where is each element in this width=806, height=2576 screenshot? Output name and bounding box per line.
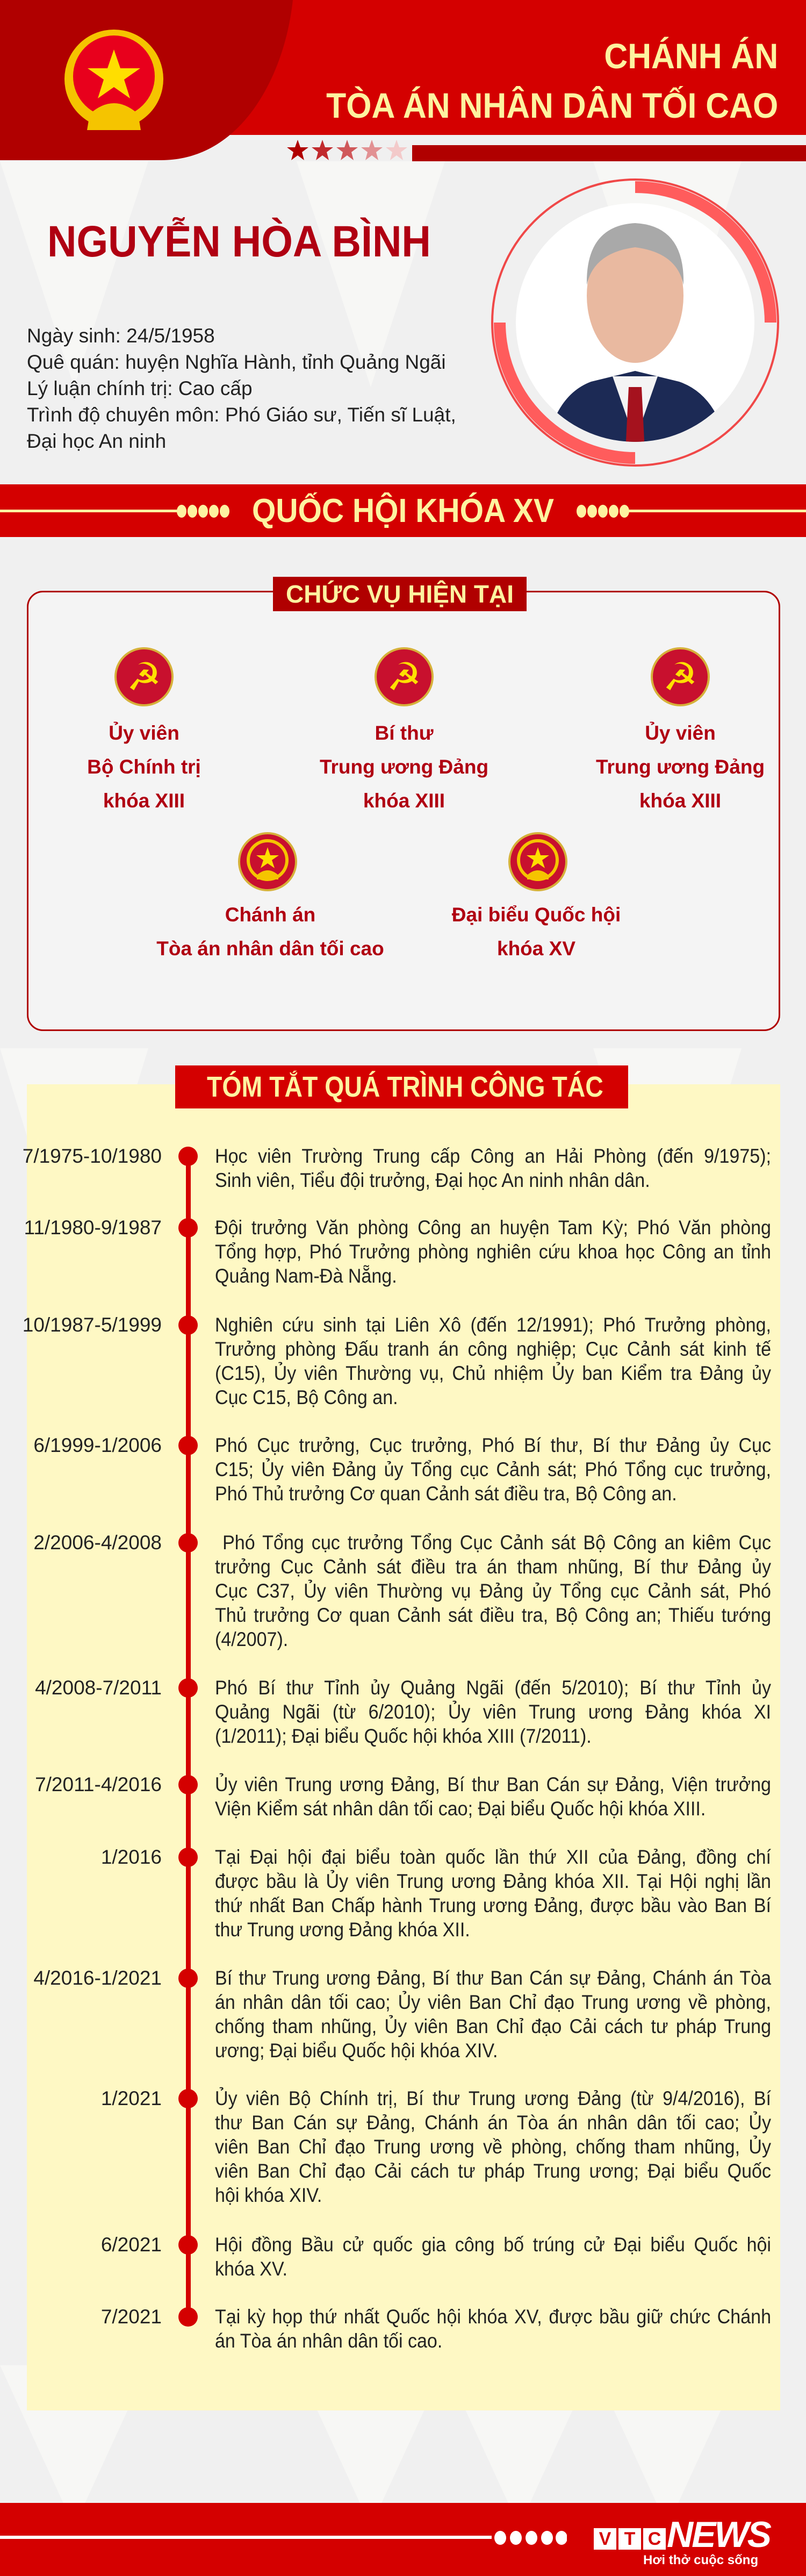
timeline item 9: án nhân dân tối cao; Ủy viên Ban Chỉ đạo Trung ương về phòng, [215, 1991, 771, 2013]
timeline item 5: 2/2006-4/2008 [33, 1532, 162, 1554]
info text block: Lý luận chính trị: Cao cấp [27, 377, 253, 399]
timeline item 7 [35, 1773, 771, 1820]
info text block: Đại học An ninh [27, 430, 166, 452]
text: position 3 [596, 721, 765, 812]
text: position 5 [451, 904, 621, 960]
timeline item 3: Trưởng phòng Đấu tranh án công nghiệp; Cục Cảnh sát kinh tế [215, 1338, 771, 1360]
text: position 1: khóa XIII [103, 790, 185, 812]
label: current positions: CHỨC VỤ HIỆN TẠI [286, 580, 514, 608]
text: position 4: Chánh án [225, 904, 315, 926]
text: position 2: Bí thư [375, 722, 433, 744]
timeline item 8: thứ nhất Ban Chấp hành Trung ương Đảng, được bầu vào Ban Bí [215, 1894, 771, 1916]
icon: party emblem 1 [114, 647, 174, 706]
text: position 3: khóa XIII [639, 790, 721, 812]
timeline item 2: 11/1980-9/1987 [24, 1217, 162, 1239]
timeline item 6: Quảng Ngãi (từ 6/2010); Ủy viên Trung ương Đảng khóa XI [215, 1701, 771, 1723]
timeline item 10: viên Ban Chỉ đạo Trung ương về phòng, chống tham nhũng, Ủy [215, 2136, 771, 2158]
stars rating [287, 140, 407, 160]
timeline item 5: (4/2007). [215, 1628, 288, 1650]
timeline item 2: Quảng Nam-Đà Nẵng. [215, 1265, 397, 1287]
timeline item 8: thư Trung ương Đảng khóa XII. [215, 1919, 470, 1941]
logo: VTC News: T [624, 2529, 635, 2549]
info text block: Trình độ chuyên môn: Phó Giáo sư, Tiến sĩ Luật, [27, 404, 456, 426]
icon: party emblem 3: ☭ [663, 654, 697, 699]
info text block: Ngày sinh: 24/5/1958 [27, 325, 215, 347]
timeline item 9 [33, 1967, 772, 2062]
label: career summary: TÓM TẮT QUÁ TRÌNH CÔNG TÁC [207, 1071, 603, 1103]
timeline item 6: 4/2008-7/2011 [35, 1677, 162, 1699]
timeline line [186, 1156, 191, 2317]
timeline item 10: thư Ban Cán sự Đảng, Chánh án Tòa án nhân dân tối cao; Ủy [215, 2112, 771, 2134]
timeline item 2: Tổng hợp, Phó Trưởng phòng nghiên cứu khoa học Công an tỉnh [215, 1241, 771, 1263]
timeline item 8 [101, 1846, 771, 1941]
title: CHÁNH ÁN [604, 36, 778, 76]
info text block: Quê quán: huyện Nghĩa Hành, tỉnh Quảng Ngãi [27, 351, 446, 373]
timeline item 4: 6/1999-1/2006 [33, 1434, 162, 1456]
name heading: NGUYỄN HÒA BÌNH [47, 217, 431, 266]
timeline item 10: viên Ban Chỉ đạo Cải cách tư pháp Trung ương; Đại biểu Quốc [215, 2160, 771, 2182]
text: position 3: Ủy viên [645, 722, 716, 744]
header banner [0, 0, 806, 135]
icon: party emblem 2 [375, 647, 434, 706]
timeline item 12: án Tòa án nhân dân tối cao. [215, 2330, 442, 2352]
title [326, 36, 778, 125]
icon: national emblem 2 [508, 832, 567, 891]
timeline item 8: 1/2016 [101, 1846, 162, 1868]
timeline item 4 [33, 1434, 771, 1505]
text: position 2 [320, 722, 488, 812]
timeline item 4: Phó Cục trưởng, Cục trưởng, Phó Bí thư, Bí thư Đảng ủy Cục [215, 1434, 771, 1456]
timeline item 5: Phó Tổng cục trưởng Tổng Cục Cảnh sát Bộ Công an kiêm Cục [222, 1532, 771, 1554]
timeline item 11: khóa XV. [215, 2258, 287, 2280]
timeline item 9: chống tham nhũng, Ủy viên Ban Chỉ đạo Cải cách tư pháp Trung [215, 2015, 771, 2037]
timeline item 10: 1/2021 [101, 2087, 162, 2109]
timeline item 6: (1/2011); Đại biểu Quốc hội khóa XIII (7/2011). [215, 1725, 592, 1747]
logo: VTC News: C [648, 2529, 661, 2549]
portrait [491, 178, 779, 467]
timeline item 11: 6/2021 [101, 2234, 162, 2256]
timeline item 5: Cục C37, Ủy viên Thường vụ Đảng ủy Tổng cục Cảnh sát, Phó [215, 1580, 771, 1602]
timeline item 5 [33, 1532, 771, 1650]
timeline item 8: Tại Đại hội đại biểu toàn quốc lần thứ XII của Đảng, đồng chí [215, 1846, 771, 1868]
logo: VTC News: NEWS [667, 2514, 770, 2555]
timeline item 3: 10/1987-5/1999 [23, 1314, 162, 1336]
timeline item 12: Tại kỳ họp thứ nhất Quốc hội khóa XV, được bầu giữ chức Chánh [215, 2306, 771, 2328]
timeline item 3: Nghiên cứu sinh tại Liên Xô (đến 12/1991); Phó Trưởng phòng, [215, 1314, 771, 1336]
timeline item 11: Hội đồng Bầu cử quốc gia công bố trúng cử Đại biểu Quốc hội [215, 2234, 771, 2256]
timeline item 5: trưởng Cục Cảnh sát điều tra án tham nhũng, Bí thư Đảng ủy [215, 1556, 771, 1578]
timeline item 3: (C15), Ủy viên Thường vụ, Chủ nhiệm Ủy ban Kiểm tra Đảng ủy [215, 1362, 771, 1384]
text: position 1: Ủy viên [109, 722, 179, 744]
text: position 5: khóa XV [497, 938, 575, 960]
timeline item 10 [101, 2087, 771, 2206]
icon: party emblem 2: ☭ [387, 654, 421, 699]
title: TÒA ÁN NHÂN DÂN TỐI CAO [326, 85, 778, 125]
timeline item 11 [101, 2234, 771, 2280]
text: position 2: khóa XIII [363, 790, 445, 812]
timeline item 7: Ủy viên Trung ương Đảng, Bí thư Ban Cán sự Đảng, Viện trưởng [215, 1773, 771, 1795]
banner: Quốc hội khóa XV: QUỐC HỘI KHÓA XV [252, 492, 554, 529]
timeline item 10: hội khóa XIV. [215, 2184, 322, 2206]
timeline item 5: Thủ trưởng Cơ quan Cảnh sát điều tra, Bộ Công an; Thiếu tướng [215, 1604, 771, 1626]
text: position 4: Tòa án nhân dân tối cao [156, 938, 384, 960]
timeline item 1: 7/1975-10/1980 [23, 1145, 162, 1167]
timeline item 9: 4/2016-1/2021 [33, 1967, 162, 1989]
timeline item 3 [23, 1314, 771, 1408]
text: position 2: Trung ương Đảng [320, 756, 488, 778]
timeline item 4: Phó Thủ trưởng Cơ quan Cảnh sát điều tra, Bộ Công an. [215, 1483, 677, 1505]
text: position 3: Trung ương Đảng [596, 756, 765, 778]
banner: Quốc hội khóa XV [0, 484, 806, 537]
text: position 5: Đại biểu Quốc hội [452, 904, 621, 926]
logo: VTC News: V [599, 2529, 611, 2549]
timeline item 1: Học viên Trường Trung cấp Công an Hải Phòng (đến 9/1975); [215, 1145, 771, 1167]
timeline item 3: Cục C15, Bộ Công an. [215, 1386, 398, 1408]
info text block [27, 325, 456, 452]
timeline item 4: C15; Ủy viên Đảng ủy Tổng cục Cảnh sát; Phó Tổng cục trưởng, [215, 1458, 771, 1480]
label: career summary [175, 1065, 628, 1108]
timeline item 12: 7/2021 [101, 2306, 162, 2328]
timeline item 9: Bí thư Trung ương Đảng, Bí thư Ban Cán sự Đảng, Chánh án Tòa [215, 1967, 771, 1989]
timeline item 2: Đội trưởng Văn phòng Công an huyện Tam Kỳ; Phó Văn phòng [215, 1217, 771, 1239]
timeline item 9: ương; Đại biểu Quốc hội khóa XIV. [215, 2040, 498, 2062]
timeline item 6 [35, 1677, 771, 1747]
panel: career timeline [27, 1084, 780, 2410]
timeline item 1 [23, 1145, 771, 1191]
timeline item 12 [101, 2306, 771, 2352]
timeline item 7: Viện Kiểm sát nhân dân tối cao; Đại biểu Quốc hội khóa XIII. [215, 1798, 706, 1820]
text: position 4 [156, 904, 384, 960]
icon: party emblem 1: ☭ [127, 654, 161, 699]
timeline item 10: Ủy viên Bộ Chính trị, Bí thư Trung ương Đảng (từ 9/4/2016), Bí [215, 2087, 771, 2109]
icon: national emblem [64, 30, 163, 130]
timeline item 7: 7/2011-4/2016 [35, 1773, 162, 1795]
timeline item 1: Sinh viên, Tiểu đội trưởng, Đại học An ninh nhân dân. [215, 1169, 650, 1191]
footer [0, 2503, 806, 2576]
text: position 1: Bộ Chính trị [87, 756, 201, 778]
header dark bar [412, 145, 806, 161]
icon: party emblem 3 [651, 647, 710, 706]
timeline item 8: được bầu là Ủy viên Trung ương Đảng khóa XII. Tại Hội nghị lần [215, 1870, 771, 1892]
timeline item 2 [24, 1217, 771, 1287]
header dark shape [0, 0, 293, 160]
logo: VTC News [594, 2514, 772, 2567]
logo: VTC News: Hơi thở cuộc sống [643, 2553, 758, 2567]
icon: national emblem 1 [238, 832, 297, 891]
panel: current positions [27, 591, 780, 1031]
text: position 1 [87, 721, 201, 812]
timeline item 6: Phó Bí thư Tỉnh ủy Quảng Ngãi (đến 5/2010); Bí thư Tỉnh ủy [215, 1677, 771, 1699]
